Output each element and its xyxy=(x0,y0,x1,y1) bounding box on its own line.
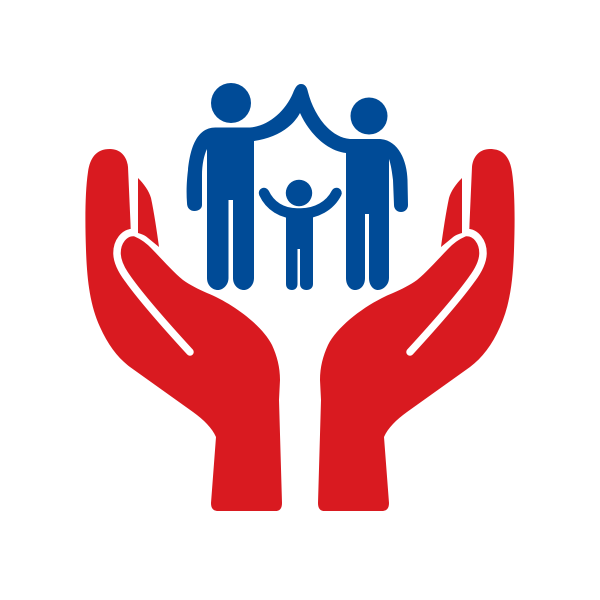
icon: child body with raised arms xyxy=(264,193,336,290)
icon: right adult head xyxy=(350,98,388,134)
icon: child head xyxy=(286,180,312,206)
icon: left hand xyxy=(85,149,282,511)
icon: left adult head xyxy=(211,83,251,123)
icon: adults with joined raised arms xyxy=(187,84,408,290)
icon: family of three xyxy=(187,83,408,290)
icon: right hand xyxy=(318,149,515,511)
